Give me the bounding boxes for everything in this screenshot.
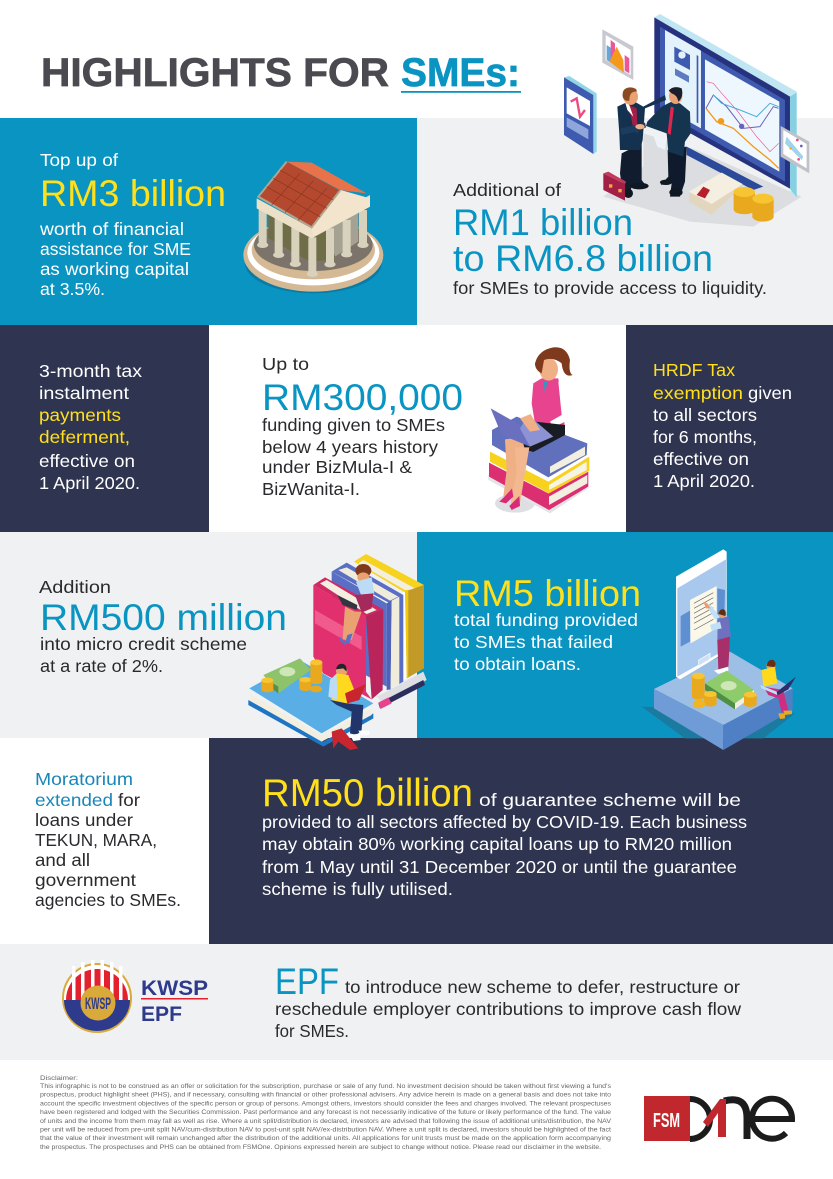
text: working capital: worth of financial (39, 219, 184, 239)
disclaimer: per unit will be reduced from pre-unit split NAV/cum-distribution NAV to post-unit split NAV/ex-distribution NAV. Where a unit split is declared, investors should be highlighted of the fact (40, 1126, 611, 1134)
text: working capital: as working capital (40, 259, 189, 279)
illustration: books and readers (248, 554, 427, 750)
panel: tax deferment: 1 April 2020. (39, 473, 140, 493)
text: working capital (39, 219, 191, 299)
panel: HRDF tax exemption (626, 325, 833, 532)
panel: tax deferment (0, 325, 209, 532)
icon: platform (654, 652, 793, 750)
heading: RM500 million: RM500 million (40, 597, 287, 638)
icon: book stack (489, 417, 589, 510)
panel: RM300,000 funding: below 4 years history (262, 437, 438, 457)
panel: RM500 million micro credit: at a rate of 2%. (40, 656, 163, 676)
icon: seated woman (337, 564, 374, 645)
panel: RM500 million micro credit: into micro credit scheme (40, 634, 247, 654)
panel: EPF scheme: for SMEs. (275, 1021, 349, 1041)
icon: briefcase (603, 172, 626, 201)
heading: RM50 billion: RM50 billion (262, 772, 473, 815)
panel: RM5 billion funding: total funding provided (454, 610, 638, 630)
panel: RM3 billion top up (0, 118, 417, 325)
illustration: businessmen and monitor (564, 14, 809, 227)
panel: HRDF tax exemption: HRDF Tax (653, 360, 735, 380)
text: working capital: at 3.5%. (40, 279, 105, 299)
icon: businessman right (646, 87, 691, 197)
panel: RM300,000 funding: under BizMula-I & (262, 457, 412, 477)
icon: area chart card (602, 29, 633, 80)
panel: tax deferment: effective on (39, 451, 135, 471)
text: additional of: Additional of (453, 180, 561, 200)
panel: moratorium: agencies to SMEs. (35, 890, 181, 910)
icon: coins (734, 187, 774, 222)
illustration: bank building (243, 162, 383, 293)
panel: moratorium: TEKUN, MARA, (35, 830, 157, 850)
panel: HRDF tax exemption: given (748, 383, 792, 403)
panel: HRDF tax exemption: 1 April 2020. (653, 471, 755, 491)
illustration: woman on books (488, 347, 593, 513)
icon: businessman left (617, 87, 666, 198)
icon: banknote (263, 658, 311, 693)
panel: RM50 billion guarantee scheme: of guarantee scheme will be (479, 790, 741, 810)
icon: certificate (689, 173, 743, 215)
panel: EPF scheme (0, 944, 833, 1060)
panel: moratorium: Moratorium (35, 769, 133, 789)
icon: blue book (248, 660, 373, 750)
disclaimer: prospectus, product highlight sheet (PHS), and if necessary, consulting with financial or other professional advisers. Any advice herein is made on a general basis and does not take into (40, 1092, 612, 1099)
panel: RM5 billion funding: to SMEs that failed (454, 632, 613, 652)
panel: moratorium: and all (35, 850, 90, 870)
panel: RM50 billion guarantee scheme: from 1 May until 31 December 2020 or until the guarantee (262, 857, 737, 877)
icon: man with laptop (760, 660, 796, 719)
panel: EPF scheme: reschedule employer contributions to improve cash flow (275, 999, 741, 1019)
icon: monitor (654, 14, 797, 197)
panel: moratorium: for (118, 790, 140, 810)
panel: RM500 million micro credit: Addition (39, 577, 111, 597)
disclaimer: of units and the income from them may fall as well as rise. Where a unit split/distribution is declared, investors are advised that following the issue of additional units/distribution, the NAV (40, 1118, 612, 1125)
panel: RM50 billion guarantee scheme: may obtain 80% working capital loans up to RM20 million (262, 834, 732, 854)
panel: moratorium: extended (35, 790, 113, 810)
columns (257, 208, 369, 277)
icon: woman (491, 347, 573, 510)
panel: RM300,000 funding: BizWanita-I. (262, 479, 360, 499)
illustration: phone and people (642, 549, 796, 750)
disclaimer: Disclaimer: (40, 1075, 78, 1082)
logo: KWSP EPF: EPF (141, 1003, 182, 1026)
logo: KWSP EPF: KWSP (85, 994, 111, 1013)
text: working capital: assistance for SME (40, 239, 191, 259)
panel: RM50 billion guarantee scheme: provided to all sectors affected by COVID-19. Each business (262, 812, 747, 832)
title: HIGHLIGHTS FOR (41, 51, 389, 95)
panel: HRDF tax exemption: effective on (653, 449, 749, 469)
panel: moratorium (0, 738, 209, 944)
panel: RM1 billion liquidity (417, 118, 833, 325)
heading: RM1 billion: RM1 billion (453, 202, 633, 243)
icon: pen (378, 680, 425, 709)
panel: RM300,000 funding: Up to (262, 354, 309, 374)
panel: tax deferment: 3-month tax (39, 361, 142, 381)
logo: KWSP EPF (62, 960, 208, 1033)
panel: RM5 billion funding: to obtain loans. (454, 654, 581, 674)
panel: RM500 million micro credit (0, 532, 417, 738)
panel: moratorium: loans under (35, 810, 133, 830)
heading: RM300,000: RM300,000 (262, 377, 463, 418)
panel: tax deferment: deferment, (39, 427, 130, 447)
panel: RM50 billion guarantee scheme: scheme is fully utilised. (262, 879, 453, 899)
panel: RM50 billion guarantee scheme (209, 738, 833, 944)
disclaimer: have been registered and lodged with the Securities Commission. Past performance and any forecast is not necessarily indicative of the future or likely performance of the fund. The value (40, 1109, 612, 1116)
heading: to RM6.8 billion: to RM6.8 billion (453, 238, 713, 279)
heading: EPF: EPF (275, 961, 339, 1002)
heading: RM5 billion: RM5 billion (454, 573, 641, 614)
panel: HRDF tax exemption: to all sectors (653, 405, 757, 425)
logo: FSMOne: FSM (653, 1110, 680, 1132)
text: top up of: Top up of (40, 150, 118, 170)
icon: coins (261, 659, 322, 692)
disclaimer: the prospectus. The prospectuses and PHS can be obtained from FSMOne. Opinions expressed herein are subject to change without notice. Please read our disclaimer in the website. (40, 1144, 601, 1151)
icon: reading man (328, 664, 369, 741)
disclaimer: account the specific investment objectives of the specific person or group of persons. Amongst others, investors should consider the fees and charges involved. The relevant prospectuses (40, 1100, 611, 1107)
panel: HRDF tax exemption: for 6 months, (653, 427, 757, 447)
icon: tablet (564, 76, 597, 154)
panel: RM5 billion funding (417, 532, 833, 738)
logo: KWSP EPF: KWSP (141, 977, 208, 1000)
panel: RM300,000 funding: funding given to SMEs (262, 415, 445, 435)
panel: tax deferment: instalment (39, 383, 129, 403)
logo: FSMOne (644, 1096, 792, 1141)
icon: tall books (313, 554, 427, 703)
title: SMEs: (401, 51, 520, 95)
panel: moratorium: government (35, 870, 136, 890)
panel: tax deferment: payments (39, 405, 121, 425)
heading: RM3 billion: RM3 billion (40, 173, 226, 214)
disclaimer: This infographic is not to be construed as an offer or solicitation for the subscription, purchase or sale of any fund. No investment decision should be taken without first viewing a fund's (40, 1083, 611, 1090)
icon: standing man (703, 602, 731, 674)
panel: HRDF tax exemption: exemption (653, 383, 743, 403)
icon: dotted card (781, 126, 809, 173)
panel: RM300,000 funding (209, 325, 626, 532)
icon: coins (692, 673, 757, 708)
icon: banknote stack (705, 671, 754, 709)
text: liquidity: for SMEs to provide access to liquidity. (453, 278, 767, 298)
icon: phone (676, 549, 727, 679)
disclaimer: that the value of their investment will remain unchanged after the distribution of the additional units. All applications for unit trusts must be made on the application form accompanying (40, 1135, 612, 1142)
disclaimer (40, 1075, 612, 1151)
panel: EPF scheme: to introduce new scheme to defer, restructure or (345, 977, 740, 997)
